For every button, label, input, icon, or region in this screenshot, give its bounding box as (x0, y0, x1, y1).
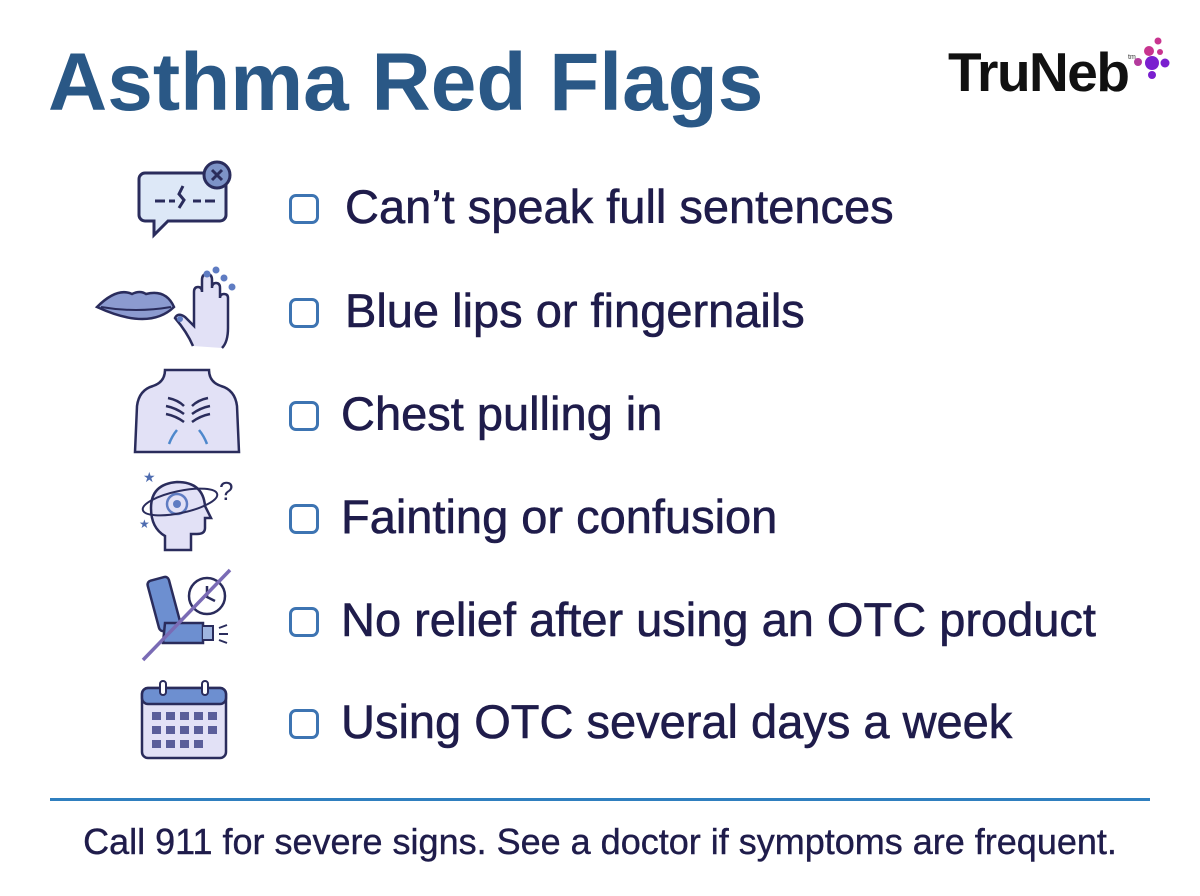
icon: speech bubble (138, 160, 232, 238)
checkbox row 4 (289, 504, 319, 534)
checkbox row 2 (289, 298, 319, 328)
checkbox row 1 (289, 194, 319, 224)
icon: lips and hand (94, 266, 236, 349)
text row 5: No relief after using an OTC product (341, 593, 1096, 646)
footer note: Call 911 for severe signs. See a doctor if symptoms are frequent. (83, 821, 1117, 862)
icon: dizzy head: ? (219, 476, 233, 506)
checkbox row 5 (289, 607, 319, 637)
icon: dizzy head (139, 470, 233, 552)
text row 1: Can’t speak full sentences (345, 180, 894, 233)
icon: dizzy head: ★ (139, 517, 150, 531)
checkbox row 6 (289, 709, 319, 739)
text row 3: Chest pulling in (341, 387, 662, 440)
logo: tm (1128, 54, 1136, 61)
logo: TruNeb (948, 41, 1128, 103)
checkbox row 3 (289, 401, 319, 431)
icon: chest (134, 368, 240, 454)
text row 6: Using OTC several days a week (341, 695, 1012, 748)
text row 4: Fainting or confusion (341, 490, 777, 543)
icon: inhaler crossed (142, 568, 232, 662)
icon: calendar (140, 680, 228, 760)
title: Asthma Red Flags (48, 37, 763, 128)
text row 2: Blue lips or fingernails (345, 284, 805, 337)
